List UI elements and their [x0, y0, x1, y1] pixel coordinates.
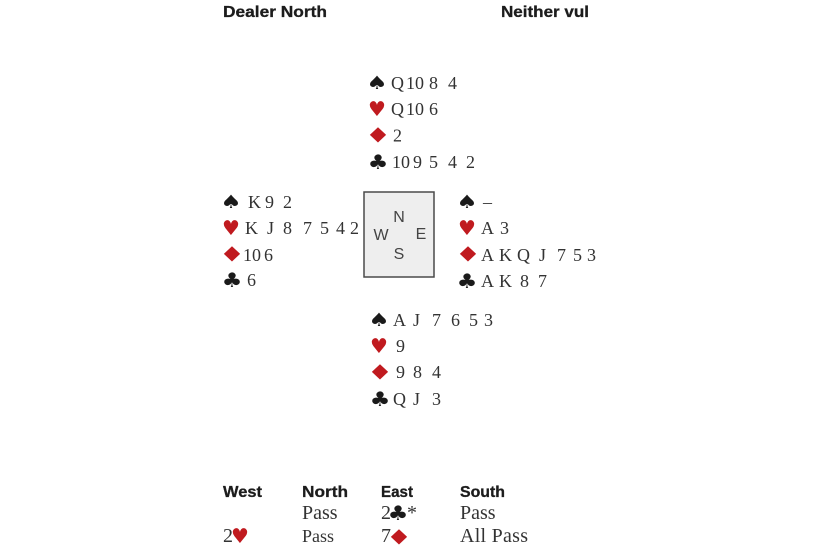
- bidding round two: Pass: [302, 526, 334, 546]
- panel: west hand: ♥: [222, 216, 240, 240]
- panel: north hand: Q: [391, 99, 404, 119]
- panel: east hand: 7: [538, 271, 547, 291]
- panel: west hand: ♣: [222, 269, 242, 293]
- panel: south hand: ♠: [368, 310, 390, 331]
- heading: dealer: Dealer North: [223, 4, 327, 21]
- panel: south hand: J: [413, 310, 420, 330]
- panel: south hand: 3: [432, 389, 441, 409]
- panel: east hand: ♦: [455, 242, 481, 266]
- panel: north hand: 10: [406, 99, 424, 119]
- panel: east hand: 7: [557, 245, 566, 265]
- panel: west hand: 6: [247, 270, 256, 290]
- panel: east hand: K: [499, 271, 512, 291]
- panel: north hand: ♣: [368, 151, 388, 175]
- bidding round one: *: [407, 502, 417, 524]
- panel: east hand: A: [481, 271, 494, 291]
- panel: west hand: 7: [303, 218, 312, 238]
- panel: east hand: ♠: [456, 192, 478, 213]
- bidding round two: All Pass: [460, 525, 528, 547]
- bidding round two: ♥: [231, 524, 249, 548]
- panel: north hand: 2: [393, 126, 402, 146]
- panel: north hand: 10: [406, 73, 424, 93]
- panel: east hand: A: [481, 218, 494, 238]
- bidding header: [223, 484, 505, 501]
- panel: west hand: K: [245, 218, 258, 238]
- panel: east hand: Q: [517, 245, 530, 265]
- panel: south hand: [367, 310, 493, 412]
- panel: west hand: 10: [243, 245, 261, 265]
- bidding header: North: [302, 484, 348, 501]
- panel: compass table: [364, 192, 434, 277]
- panel: north hand: 4: [448, 73, 457, 93]
- panel: compass table: E: [416, 226, 426, 243]
- panel: north hand: Q: [391, 73, 404, 93]
- panel: south hand: J: [413, 389, 420, 409]
- bidding round one: Pass: [460, 502, 496, 524]
- panel: west hand: 8: [283, 218, 292, 238]
- panel: south hand: ♣: [370, 388, 390, 412]
- bidding round one: Pass: [302, 502, 338, 524]
- panel: south hand: A: [393, 310, 406, 330]
- panel: north hand: ♦: [365, 123, 391, 147]
- panel: west hand: 6: [264, 245, 273, 265]
- panel: west hand: K: [248, 192, 261, 212]
- panel: south hand: 8: [413, 362, 422, 382]
- panel: south hand: Q: [393, 389, 406, 409]
- panel: south hand: 4: [432, 362, 441, 382]
- panel: west hand: 5: [320, 218, 329, 238]
- panel: south hand: 6: [451, 310, 460, 330]
- panel: compass table: W: [373, 227, 389, 244]
- panel: south hand: 9: [396, 336, 405, 356]
- panel: compass table: N: [393, 209, 405, 226]
- panel: east hand: 3: [500, 218, 509, 238]
- panel: north hand: 8: [429, 73, 438, 93]
- panel: south hand: ♥: [370, 334, 388, 358]
- panel: east hand: –: [482, 192, 493, 212]
- panel: east hand: 3: [587, 245, 596, 265]
- panel: west hand: 9: [265, 192, 274, 212]
- panel: east hand: 5: [573, 245, 582, 265]
- panel: north hand: 6: [429, 99, 438, 119]
- panel: west hand: 2: [283, 192, 292, 212]
- panel: north hand: ♠: [366, 73, 388, 94]
- bidding round two: 7: [381, 525, 391, 547]
- panel: east hand: [455, 192, 596, 294]
- bidding round one: ♣: [388, 502, 408, 526]
- panel: east hand: 8: [520, 271, 529, 291]
- panel: compass table: S: [394, 246, 404, 263]
- heading: vulnerability: Neither vul: [501, 4, 589, 21]
- bidding round two: [223, 524, 528, 549]
- panel: bidding table: [223, 484, 528, 549]
- bidding header: South: [460, 484, 505, 501]
- panel: west hand: 2: [350, 218, 359, 238]
- bidding header: West: [223, 484, 263, 501]
- bidding round two: ♦: [386, 525, 412, 549]
- panel: south hand: 3: [484, 310, 493, 330]
- panel: north hand: [365, 73, 475, 175]
- panel: east hand: ♣: [457, 270, 477, 294]
- panel: north hand: 2: [466, 152, 475, 172]
- panel: south hand: 9: [396, 362, 405, 382]
- panel: west hand: J: [267, 218, 274, 238]
- bidding round one: [302, 502, 496, 526]
- panel: west hand: 4: [336, 218, 345, 238]
- panel: south hand: ♦: [367, 360, 393, 384]
- panel: east hand: A: [481, 245, 494, 265]
- panel: north hand: 10: [392, 152, 410, 172]
- bidding header: East: [381, 484, 414, 501]
- panel: east hand: ♥: [458, 216, 476, 240]
- panel: north hand: 4: [448, 152, 457, 172]
- bidding round two: 2: [223, 525, 233, 547]
- bidding round one: 2: [381, 502, 391, 524]
- panel: north hand: 9: [413, 152, 422, 172]
- panel: south hand: 5: [469, 310, 478, 330]
- panel: west hand: [219, 192, 359, 293]
- panel: south hand: 7: [432, 310, 441, 330]
- panel: north hand: 5: [429, 152, 438, 172]
- panel: west hand: ♦: [219, 242, 245, 266]
- panel: east hand: J: [539, 245, 546, 265]
- panel: east hand: K: [499, 245, 512, 265]
- panel: west hand: ♠: [220, 192, 242, 213]
- panel: north hand: ♥: [368, 97, 386, 121]
